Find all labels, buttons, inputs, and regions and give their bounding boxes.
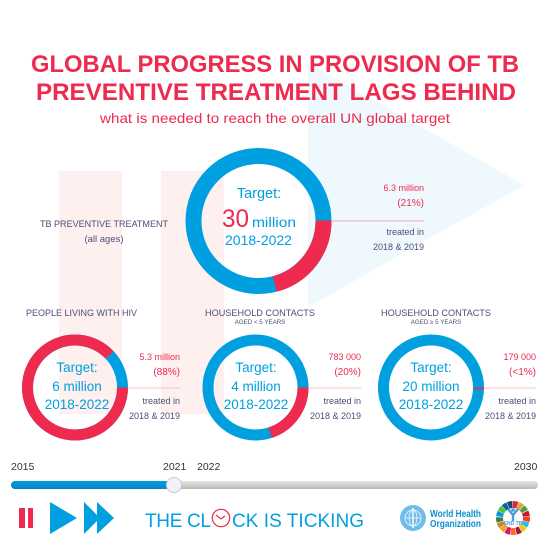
- callout: treated: 2018 & 2019: [310, 411, 361, 421]
- callout: treated: 2018 & 2019: [129, 411, 180, 421]
- callout: treated: treated in: [386, 227, 424, 237]
- panel: people living with HIV: [26, 308, 180, 435]
- donut centre text: 2018-2022: [224, 397, 288, 412]
- logo: World Health Organization: Organization: [430, 519, 481, 530]
- donut centre text: 20 million: [402, 379, 460, 394]
- panel label: AGED < 5 YEARS: [235, 319, 285, 326]
- donut chart: 20 percent: [208, 340, 303, 435]
- donut centre text: Target:: [235, 360, 277, 375]
- slogan: the clock is ticking: THE CL: [145, 511, 211, 532]
- donut centre text: [222, 186, 296, 248]
- panel label: [40, 219, 168, 245]
- donut centre text: 30: [222, 205, 249, 233]
- panel label: TB PREVENTIVE TREATMENT: [40, 219, 168, 230]
- logo: End TB wheel: [494, 499, 532, 537]
- donut centre text: [399, 360, 463, 412]
- donut centre text: 2018-2022: [45, 397, 109, 412]
- panel: household contacts under 5: [205, 308, 361, 435]
- panel label: PEOPLE LIVING WITH HIV: [26, 308, 138, 319]
- callout: treated: [128, 352, 180, 421]
- callout: treated: 5.3 million: [139, 352, 180, 362]
- donut centre text: 6 million: [52, 379, 102, 394]
- callout: treated: 2018 & 2019: [485, 411, 536, 421]
- donut centre text: [224, 360, 288, 412]
- donut centre text: 2018-2022: [399, 397, 463, 412]
- callout: treated: 179 000: [503, 352, 536, 362]
- callout: treated: (<1%): [509, 367, 536, 378]
- donut centre text: [45, 360, 109, 412]
- donut chart: 21 percent: [194, 156, 324, 286]
- donut centre text: Target:: [56, 360, 98, 375]
- callout: treated: treated in: [142, 396, 180, 406]
- callout: treated: treated in: [498, 396, 536, 406]
- callout: treated: [332, 183, 424, 252]
- callout: treated: 6.3 million: [383, 183, 424, 193]
- panel label: [381, 308, 491, 326]
- callout: treated: 2018 & 2019: [373, 242, 424, 252]
- icon: pause: [19, 508, 33, 528]
- timeline slider: [11, 478, 538, 492]
- title: PREVENTIVE TREATMENT LAGS BEHIND: [36, 79, 516, 106]
- slogan: the clock is ticking: CK IS TICKING: [232, 511, 364, 532]
- logo: World Health Organization: [400, 505, 481, 531]
- panel label: (all ages): [84, 234, 124, 245]
- callout: treated: [484, 352, 536, 421]
- donut chart: under 1 percent: [384, 340, 478, 435]
- donut centre text: 2018-2022: [225, 232, 292, 248]
- timeline year labels: 2030: [514, 461, 538, 473]
- donut centre text: Target:: [410, 360, 452, 375]
- callout: treated: (21%): [397, 198, 424, 209]
- icon: play: [50, 502, 77, 534]
- callout: treated: treated in: [323, 396, 361, 406]
- title: [31, 51, 519, 106]
- panel: household contacts 5 and over: [381, 308, 536, 435]
- callout: treated: (88%): [153, 367, 180, 378]
- slogan: the clock is ticking: [145, 509, 364, 532]
- timeline year labels: 2022: [197, 461, 221, 473]
- panel: TB preventive treatment all ages: [40, 156, 424, 286]
- icon: fast forward: [84, 502, 114, 534]
- timeline year labels: 2021: [163, 461, 187, 473]
- timeline year labels: 2015: [11, 461, 35, 473]
- panel label: HOUSEHOLD CONTACTS: [205, 308, 315, 319]
- panel label: HOUSEHOLD CONTACTS: [381, 308, 491, 319]
- subtitle: what is needed to reach the overall UN global target: [99, 110, 450, 126]
- callout: treated: [309, 352, 361, 421]
- donut centre text: Target:: [237, 186, 281, 202]
- logo: End TB wheel: END TB: [504, 521, 523, 527]
- callout: treated: 783 000: [328, 352, 361, 362]
- donut centre text: 4 million: [231, 379, 281, 394]
- panel label: [205, 308, 315, 326]
- title: GLOBAL PROGRESS IN PROVISION OF TB: [31, 51, 519, 78]
- timeline year labels: [11, 461, 538, 473]
- donut chart: 88 percent: [28, 340, 122, 435]
- callout: treated: (20%): [334, 367, 361, 378]
- panel label: AGED ≥ 5 YEARS: [411, 319, 461, 326]
- donut centre text: million: [252, 214, 296, 230]
- background: pause and play watermark: [59, 63, 524, 414]
- logo: World Health Organization: World Health: [430, 509, 481, 520]
